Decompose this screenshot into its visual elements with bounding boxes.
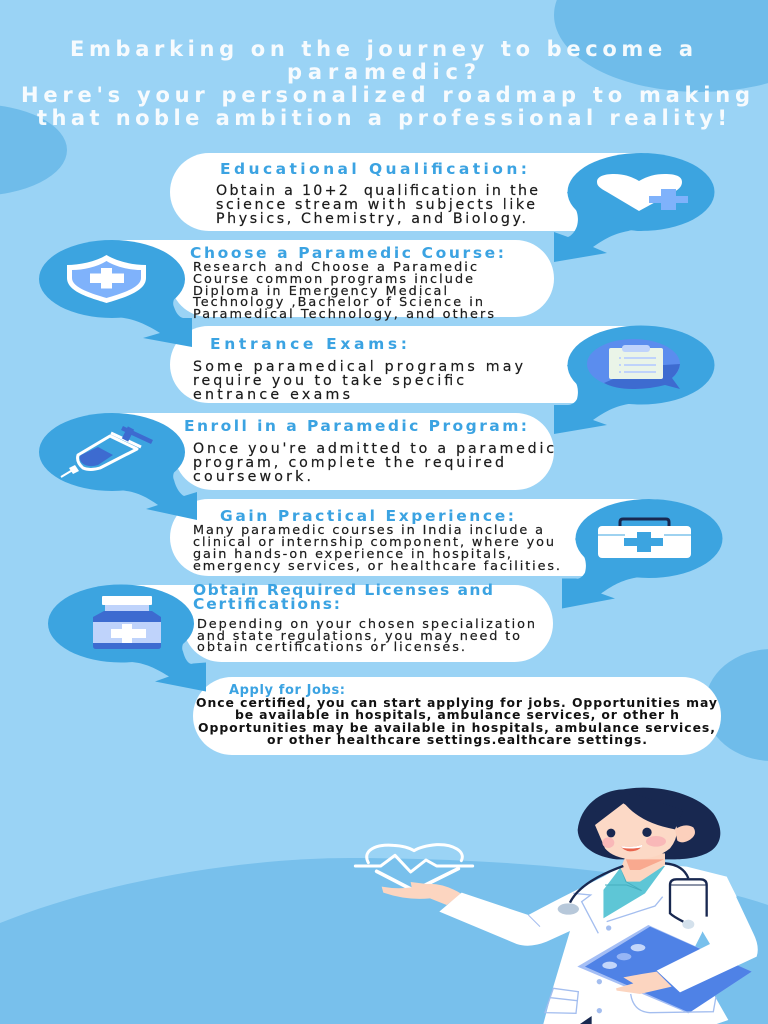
- title: [21, 37, 750, 130]
- step 4 body: Once you're admitted to a paramedic: [193, 441, 554, 457]
- step 6 heading: Certifications:: [193, 595, 340, 613]
- stethoscope: [558, 863, 707, 929]
- background blob: top right: [554, 0, 768, 92]
- step 2 body: Paramedical Technology, and others: [193, 307, 494, 322]
- title: that noble ambition a professional reality!: [37, 106, 727, 130]
- step 3 body: Some paramedical programs may: [193, 359, 523, 375]
- step 4 body: coursework.: [193, 469, 311, 485]
- lab coat body: [543, 865, 737, 1024]
- icon: clipboard in speech bubble: [587, 339, 680, 389]
- step 4 bubble: [39, 413, 197, 520]
- holding hand: [616, 972, 672, 994]
- step 2 body: Diploma in Emergency Medical: [193, 284, 447, 299]
- trousers: [580, 1016, 592, 1024]
- step 7 body: be available in hospitals, ambulance services, or other h: [235, 707, 679, 722]
- step 5 heading: Gain Practical Experience:: [220, 507, 514, 525]
- step 5 body: emergency services, or healthcare facilities.: [193, 559, 560, 574]
- step 1: educational qualification: [170, 153, 714, 262]
- hair back: [578, 788, 720, 859]
- step 6 heading: Obtain Required Licenses and: [193, 581, 493, 599]
- step 7 body: Opportunities may be available in hospitals, ambulance services,: [198, 720, 715, 735]
- step 3 body: [193, 359, 523, 403]
- pockets and buttons: [545, 988, 578, 1013]
- icon: heartbeat heart: [355, 845, 473, 891]
- face: [595, 803, 677, 859]
- step 4: enroll in a paramedic program: [39, 413, 554, 520]
- step 7 body: or other healthcare settings.ealthcare settings.: [267, 732, 647, 747]
- step 5 body: [193, 523, 560, 574]
- step 6 body: and state regulations, you may need to: [197, 629, 520, 644]
- mouth: [621, 845, 643, 851]
- ear: [675, 825, 695, 842]
- background blob: left: [0, 104, 67, 196]
- step 7 heading: Apply for Jobs:: [229, 683, 345, 698]
- step 3 body: entrance exams: [193, 387, 350, 403]
- title: Here's your personalized roadmap to making: [21, 83, 750, 107]
- step 1 heading: Educational Qualification:: [220, 160, 527, 178]
- step 5 bubble: [562, 499, 722, 608]
- illustration: doctor with clipboard and heart: [355, 788, 758, 1024]
- icon: shield with cross: [67, 255, 146, 303]
- step 1 body: [216, 183, 538, 227]
- step 2 body: Research and Choose a Paramedic: [193, 260, 477, 275]
- step 1 body: science stream with subjects like: [216, 197, 535, 213]
- step 5 body: Many paramedic courses in India include a: [193, 523, 543, 538]
- step 7 body: [196, 695, 717, 747]
- scrubs: [603, 866, 665, 918]
- step 3 bubble: [554, 326, 714, 434]
- arm sleeve: holding clipboard: [657, 877, 758, 992]
- background blob: right: [705, 649, 768, 761]
- step 5: gain practical experience: [170, 499, 722, 608]
- step 2 body: [192, 260, 494, 322]
- step 6 body: [197, 617, 535, 655]
- step 7 body: Once certified, you can start applying for jobs. Opportunities may: [196, 695, 717, 710]
- step 3 heading: Entrance Exams:: [210, 335, 407, 353]
- step 4 heading: Enroll in a Paramedic Program:: [184, 417, 527, 435]
- icon: first aid kit: [598, 519, 691, 558]
- step 4 body: program, complete the required: [193, 455, 504, 471]
- step 1 body: Obtain a 10+2 qualification in the: [216, 183, 538, 199]
- title: Embarking on the journey to become a: [70, 37, 693, 61]
- background hill: bottom: [0, 858, 768, 1024]
- title: paramedic?: [287, 60, 476, 84]
- step 6 body: obtain certifications or licenses.: [197, 640, 465, 655]
- step 2 bubble: [39, 240, 192, 347]
- step 3: entrance exams: [170, 326, 714, 434]
- step 6 body: Depending on your chosen specialization: [197, 617, 535, 632]
- step 3 body: require you to take specific: [193, 373, 464, 389]
- step 7: apply for jobs: [193, 677, 721, 755]
- clipboard: [577, 925, 752, 1013]
- step 5 body: gain hands-on experience in hospitals,: [193, 547, 511, 562]
- arm sleeve: outstretched: [439, 877, 603, 946]
- step 2: choose a paramedic course: [39, 240, 554, 347]
- eyes: [607, 829, 615, 837]
- step 1 bubble: [554, 153, 714, 262]
- step 5 body: clinical or internship component, where you: [193, 535, 554, 550]
- step 1 body: Physics, Chemistry, and Biology.: [216, 211, 526, 227]
- step 6 bubble: [48, 584, 206, 692]
- step 6 heading: [193, 581, 493, 613]
- step 6: licenses and certifications: [48, 581, 553, 692]
- hand: [382, 882, 462, 905]
- neck: [621, 853, 665, 882]
- icon: heart with plus: [597, 174, 688, 211]
- step 2 heading: Choose a Paramedic Course:: [190, 244, 504, 262]
- step 2 body: Technology ,Bachelor of Science in: [192, 295, 483, 310]
- step 2 body: Course common programs include: [193, 272, 473, 287]
- hair fringe: [593, 793, 683, 829]
- icon: syringe: [61, 428, 152, 477]
- cheeks: [646, 836, 666, 847]
- icon: medicine bottle: [93, 596, 161, 649]
- step 4 body: [193, 441, 554, 485]
